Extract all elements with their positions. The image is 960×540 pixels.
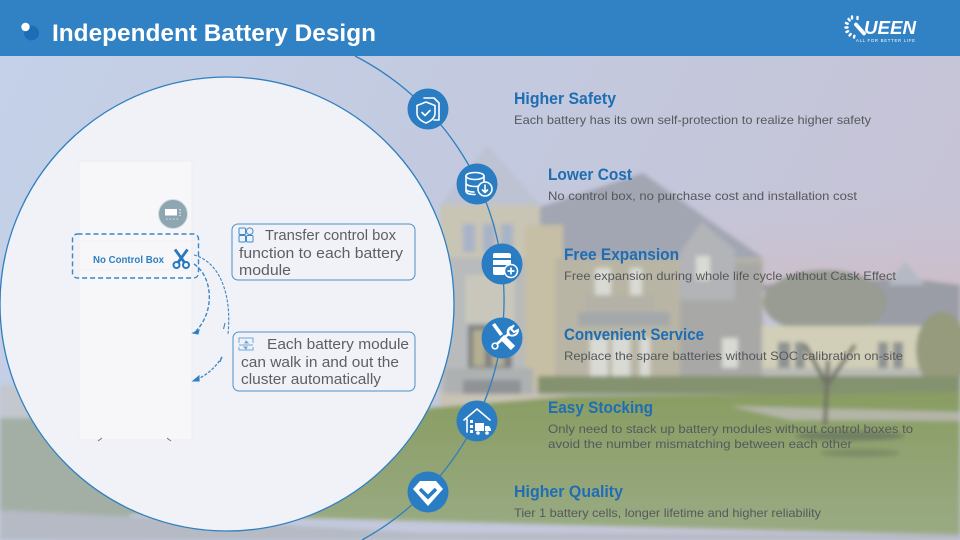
icon: database download — [456, 164, 498, 204]
icon: tools — [482, 318, 522, 358]
item: free expansion: Free expansion during whole life cycle without Cask Effect — [564, 269, 897, 283]
dashed box: no control box: No Control Box — [93, 254, 164, 266]
item: easy stocking: avoid the number mismatching between each other — [548, 437, 852, 451]
item: higher quality: Higher Quality — [514, 483, 624, 501]
item: higher quality — [514, 483, 821, 520]
item: lower cost — [548, 166, 858, 203]
item: free expansion — [564, 246, 897, 283]
callout: transfer control box: function to each battery — [239, 246, 404, 262]
item: lower cost: Lower Cost — [548, 166, 632, 184]
logo — [846, 16, 917, 43]
icon: diamond — [408, 472, 448, 512]
callout: transfer control box: Transfer control box — [265, 228, 397, 244]
battery cabinet — [79, 161, 192, 441]
item: lower cost: No control box, no purchase cost and installation cost — [548, 189, 858, 203]
item: convenient service: Replace the spare batteries without SOC calibration on-site — [564, 349, 903, 363]
callout: transfer control box: module — [239, 263, 291, 279]
item: higher safety: Higher Safety — [514, 90, 617, 108]
header bar — [0, 0, 960, 56]
title: Independent Battery Design — [52, 20, 376, 47]
item: higher safety: Each battery has its own self-protection to realize higher safety — [514, 113, 871, 127]
icon: shield — [408, 88, 448, 130]
callout: walk in and out — [233, 332, 415, 391]
panel: large white circle — [0, 77, 454, 531]
item: higher quality: Tier 1 battery cells, longer lifetime and higher reliability — [514, 506, 821, 520]
callout: walk in and out: cluster automatically — [241, 372, 382, 388]
arrow: dashed curves — [193, 255, 229, 381]
icon: scissors — [174, 250, 189, 268]
item: easy stocking: Only need to stack up battery modules without control boxes to — [548, 422, 913, 436]
item: higher safety — [514, 90, 871, 127]
dashed box: no control box — [72, 234, 198, 278]
callout: walk in and out: can walk in and out the — [241, 355, 399, 371]
icon: swap — [239, 338, 253, 350]
logo: ALL FOR BETTER LIFE — [856, 38, 915, 43]
logo: UEEN — [864, 17, 917, 38]
item: easy stocking — [548, 399, 913, 451]
item: free expansion: Free Expansion — [564, 246, 679, 264]
item: easy stocking: Easy Stocking — [548, 399, 653, 417]
icon: warehouse truck — [456, 400, 498, 442]
icon: grid — [239, 228, 253, 242]
item: convenient service: Convenient Service — [564, 326, 704, 344]
outer arc connector line — [355, 56, 504, 540]
display badge — [158, 200, 188, 228]
callout: transfer control box — [232, 224, 415, 280]
header bullet icon — [21, 23, 39, 40]
icon: battery plus — [482, 244, 522, 284]
callout: walk in and out: Each battery module — [267, 337, 409, 353]
item: convenient service — [564, 326, 903, 363]
